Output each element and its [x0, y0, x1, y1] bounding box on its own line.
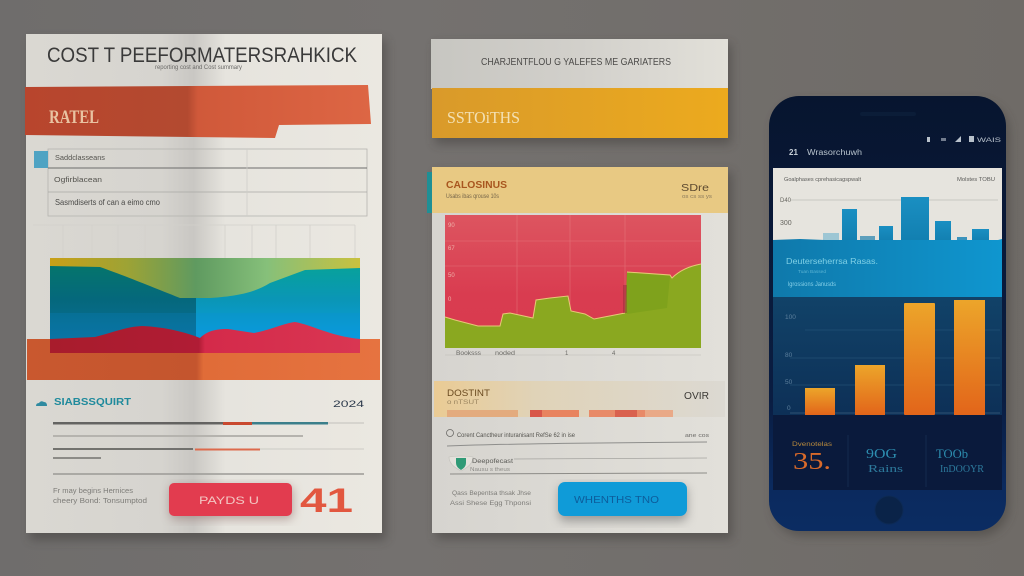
- app title: Wrasorchuwh: [807, 148, 862, 157]
- bar labels: Rsa: [964, 420, 979, 429]
- header: cream title block: [432, 167, 728, 213]
- text: middle footer note: Qass Bepentsa thsak Jhse: [452, 490, 531, 497]
- section: cost summary: [434, 381, 725, 417]
- row: first detail: [446, 430, 710, 446]
- header: cream title block: CALOSINUS: [446, 179, 507, 191]
- section: cost summary: o nTSUT: [447, 400, 479, 406]
- stats row: [773, 415, 1002, 490]
- chart: red and green area: [445, 215, 701, 348]
- screen: light chart panel: 300: [780, 220, 792, 227]
- row: second detail with shield: Nausu s theus: [470, 467, 511, 473]
- screen: light chart panel: Goalphases cprehasicagspwalt: [784, 177, 861, 183]
- bar labels: [813, 420, 979, 429]
- row: second detail with shield: Deepofecast: [472, 459, 513, 465]
- text: middle footer note: [450, 490, 531, 507]
- text lines: detail rows: [53, 422, 364, 474]
- screen: light chart panel: Molstes TOBU: [957, 177, 995, 183]
- chart axis labels: 1: [565, 351, 569, 357]
- chart axis labels: Booksss: [456, 351, 481, 357]
- icon: green shield: [456, 458, 466, 470]
- chart: red and green area: 50: [448, 273, 455, 279]
- icon: home button: [875, 496, 903, 524]
- app title: [789, 148, 862, 157]
- figure: large red number: 41: [300, 482, 353, 520]
- stat: orange figure: 35.: [793, 449, 831, 475]
- bar labels: Tuls: [813, 420, 828, 429]
- button: red action: PAYDS U: [199, 495, 259, 507]
- chart axis labels: noded: [495, 351, 515, 357]
- speaker: [860, 112, 916, 116]
- stat: orange figure: [792, 441, 833, 475]
- chart grid: [33, 225, 355, 260]
- status bar: WAIS: [977, 138, 1001, 144]
- app title: 21: [789, 148, 798, 157]
- heading: lower section: SIABSSQUIRT: [54, 396, 132, 408]
- stat: blue figure one: [866, 447, 903, 475]
- text: footer note: [53, 488, 147, 505]
- bar labels: Sat: [913, 420, 926, 429]
- stat: blue figure two: [936, 446, 984, 475]
- header: cream title block: Usabs ibas qrouse 10s: [446, 194, 499, 200]
- area chart: stacked cost layers: [50, 258, 360, 353]
- button: red action: [169, 483, 293, 519]
- text: report subtitle: reporting cost and Cost summary: [155, 65, 242, 71]
- table: summary rows: Saddclasseans: [55, 153, 105, 162]
- chart axis labels: 4: [612, 351, 616, 357]
- stat: blue figure one: Rains: [868, 464, 903, 475]
- chart: red and green area: 0: [448, 297, 452, 303]
- section: cost summary: DOSTINT: [447, 388, 490, 399]
- row: first detail: ane cos: [685, 433, 710, 439]
- heading: lower section: 2024: [333, 399, 364, 409]
- table: summary rows: Ogfirblacean: [54, 175, 102, 184]
- text: footer note: cheery Bond: Tonsumptod: [53, 498, 147, 505]
- stat: blue figure one: 9OG: [866, 447, 897, 462]
- screen: blue summary panel: lgrossions Janusds: [788, 282, 836, 288]
- accent: teal tab: [427, 172, 432, 213]
- button: blue action: WHENTHS TNO: [574, 494, 659, 506]
- screen: navy bar chart: [773, 297, 1002, 429]
- stat: blue figure two: TOOb: [936, 446, 968, 461]
- stacked progress bar: [447, 410, 673, 417]
- heading: report title: COST T PEEFORMATERSRAHKICK: [47, 44, 357, 67]
- status bar: [927, 136, 1001, 144]
- bar chart: orange bars: [805, 300, 985, 415]
- banner: amber band: SSTOiTHS: [447, 108, 520, 127]
- panel: smartphone: [769, 96, 1009, 536]
- band: orange base behind chart: [27, 339, 380, 380]
- screen: blue summary panel: Tuan Bassed: [798, 269, 827, 274]
- chart: red and green area: 67: [448, 246, 455, 252]
- screen: light chart panel: D40: [780, 198, 792, 204]
- screen: light chart panel: [773, 168, 1002, 242]
- heading: card title: CHARJENTFLOU G YALEFES ME GARIATERS: [481, 57, 671, 68]
- chart: red and green area: 90: [448, 223, 455, 229]
- table: summary rows: [34, 149, 367, 216]
- icon: cloud: [36, 401, 47, 406]
- banner: red rate band: RATEL: [49, 107, 99, 128]
- chart axis labels: [445, 351, 701, 357]
- stat: blue figure two: InDOOYR: [940, 464, 984, 475]
- screen: navy bar chart: 100: [785, 314, 796, 321]
- banner: amber band: [432, 88, 728, 138]
- row: first detail: Corent Canctheur inturanisant RefSe 62 in ise: [457, 432, 575, 439]
- panel: middle chart sheet: [427, 167, 732, 539]
- button: blue action: [558, 482, 687, 521]
- bar labels: sch: [864, 420, 876, 429]
- table: summary rows: Sasmdiserts of can a eimo cmo: [55, 198, 161, 207]
- screen: navy bar chart: 80: [785, 352, 793, 359]
- panel: top middle card: [431, 39, 731, 144]
- screen: navy bar chart: 0: [787, 405, 791, 412]
- panel: left report sheet: [25, 34, 386, 540]
- screen: blue summary panel: [773, 239, 1002, 297]
- screen: blue summary panel: Deuterseherrsa Rasas.: [786, 256, 878, 266]
- screen: navy bar chart: 50: [785, 379, 793, 386]
- section: cost summary: OVIR: [684, 391, 709, 402]
- heading: lower section: [36, 396, 364, 409]
- row: second detail with shield: [449, 456, 707, 474]
- header: cream title block: os cs ss ys: [682, 194, 713, 200]
- header: cream title block: SDre: [681, 183, 710, 194]
- text: middle footer note: Assi Shese Egg Thponsi: [450, 500, 531, 507]
- bar chart: blue bars: [823, 197, 989, 242]
- text: footer note: Fr may begins Hernices: [53, 488, 134, 495]
- banner: red rate band: [25, 85, 371, 138]
- stat: orange figure: Dvenotelas: [792, 441, 833, 448]
